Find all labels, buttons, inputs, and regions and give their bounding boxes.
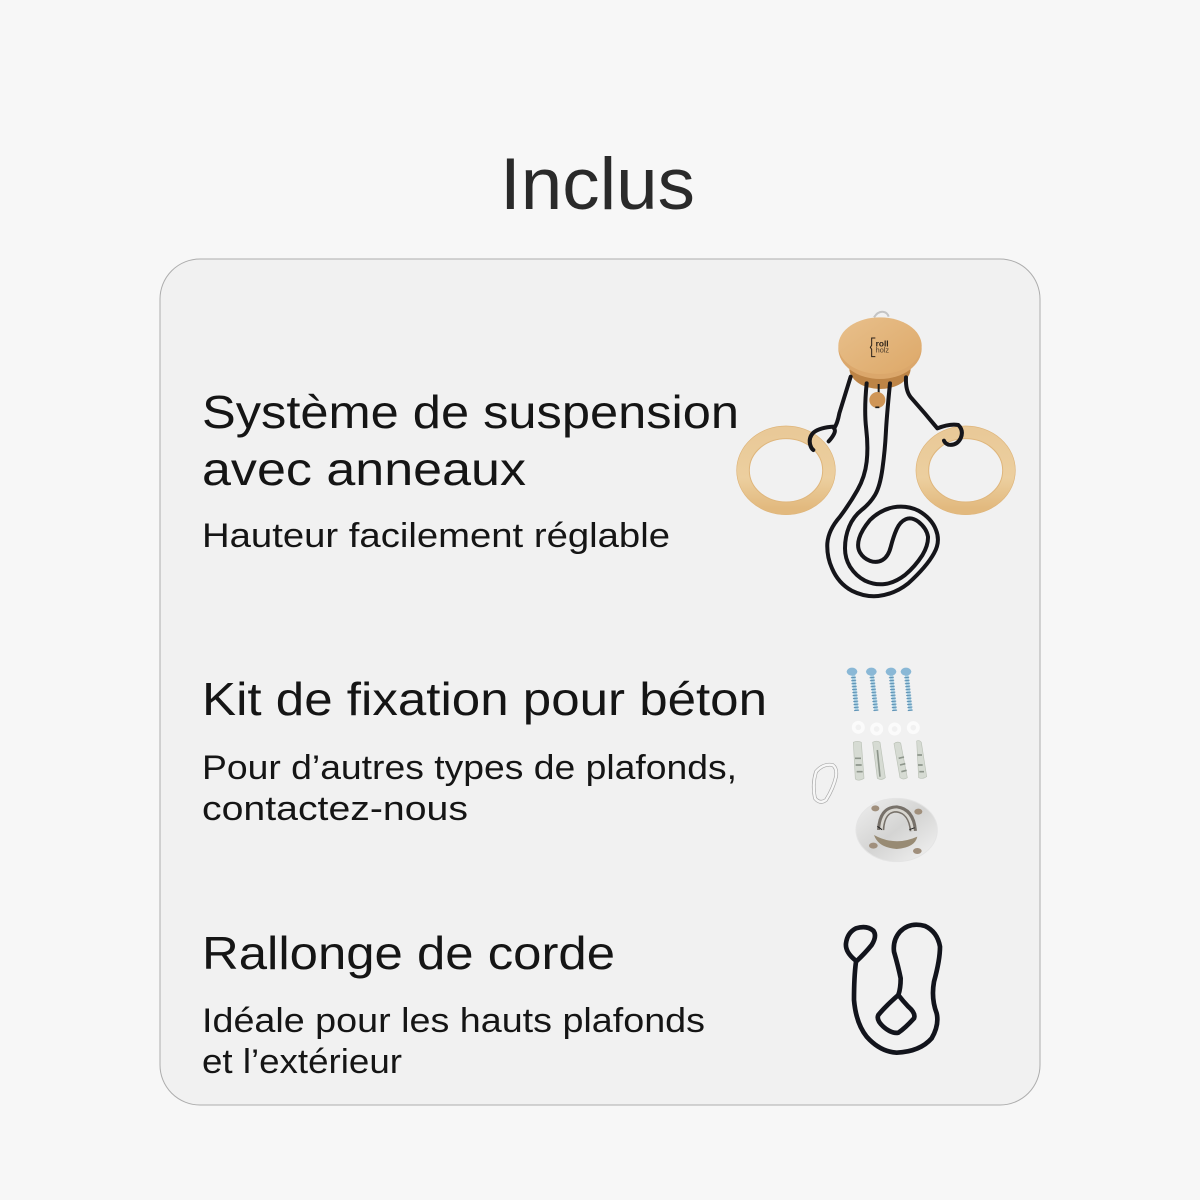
round wooden mount <box>838 317 922 389</box>
icon: rope extension loop <box>846 925 940 1053</box>
text: fixing kit description <box>202 749 737 828</box>
icon: fixing hardware kit <box>814 668 937 862</box>
heading: suspension system: Système de suspension <box>202 386 739 438</box>
heading: suspension system: avec anneaux <box>202 443 526 495</box>
washers <box>854 723 918 734</box>
icon: wooden rings with rope <box>737 312 1015 596</box>
hook <box>874 312 889 317</box>
wall plugs <box>853 741 927 780</box>
right ring <box>916 426 1015 515</box>
text: fixing kit description: Pour d’autres types de plafonds, <box>202 749 737 787</box>
panel: included items <box>160 259 1040 1105</box>
carabiner <box>814 765 836 802</box>
screws <box>847 668 911 711</box>
text: rope extension description <box>202 1002 705 1081</box>
wooden bead <box>869 384 885 408</box>
heading: concrete fixing kit: Kit de fixation pour béton <box>202 673 767 725</box>
heading: suspension system <box>202 386 739 495</box>
text: rope extension description: Idéale pour les hauts plafonds <box>202 1002 705 1040</box>
text: suspension description: Hauteur facilement réglable <box>202 517 670 555</box>
title: Inclus <box>500 144 695 225</box>
round wooden mount: roll <box>876 338 889 348</box>
round wooden mount: holz <box>876 346 889 355</box>
text: rope extension description: et l’extérieur <box>202 1043 402 1081</box>
text: fixing kit description: contactez-nous <box>202 790 468 828</box>
ceiling mount plate <box>856 798 937 862</box>
left ring <box>737 426 835 515</box>
heading: rope extension: Rallonge de corde <box>202 927 615 979</box>
rope <box>810 377 962 596</box>
